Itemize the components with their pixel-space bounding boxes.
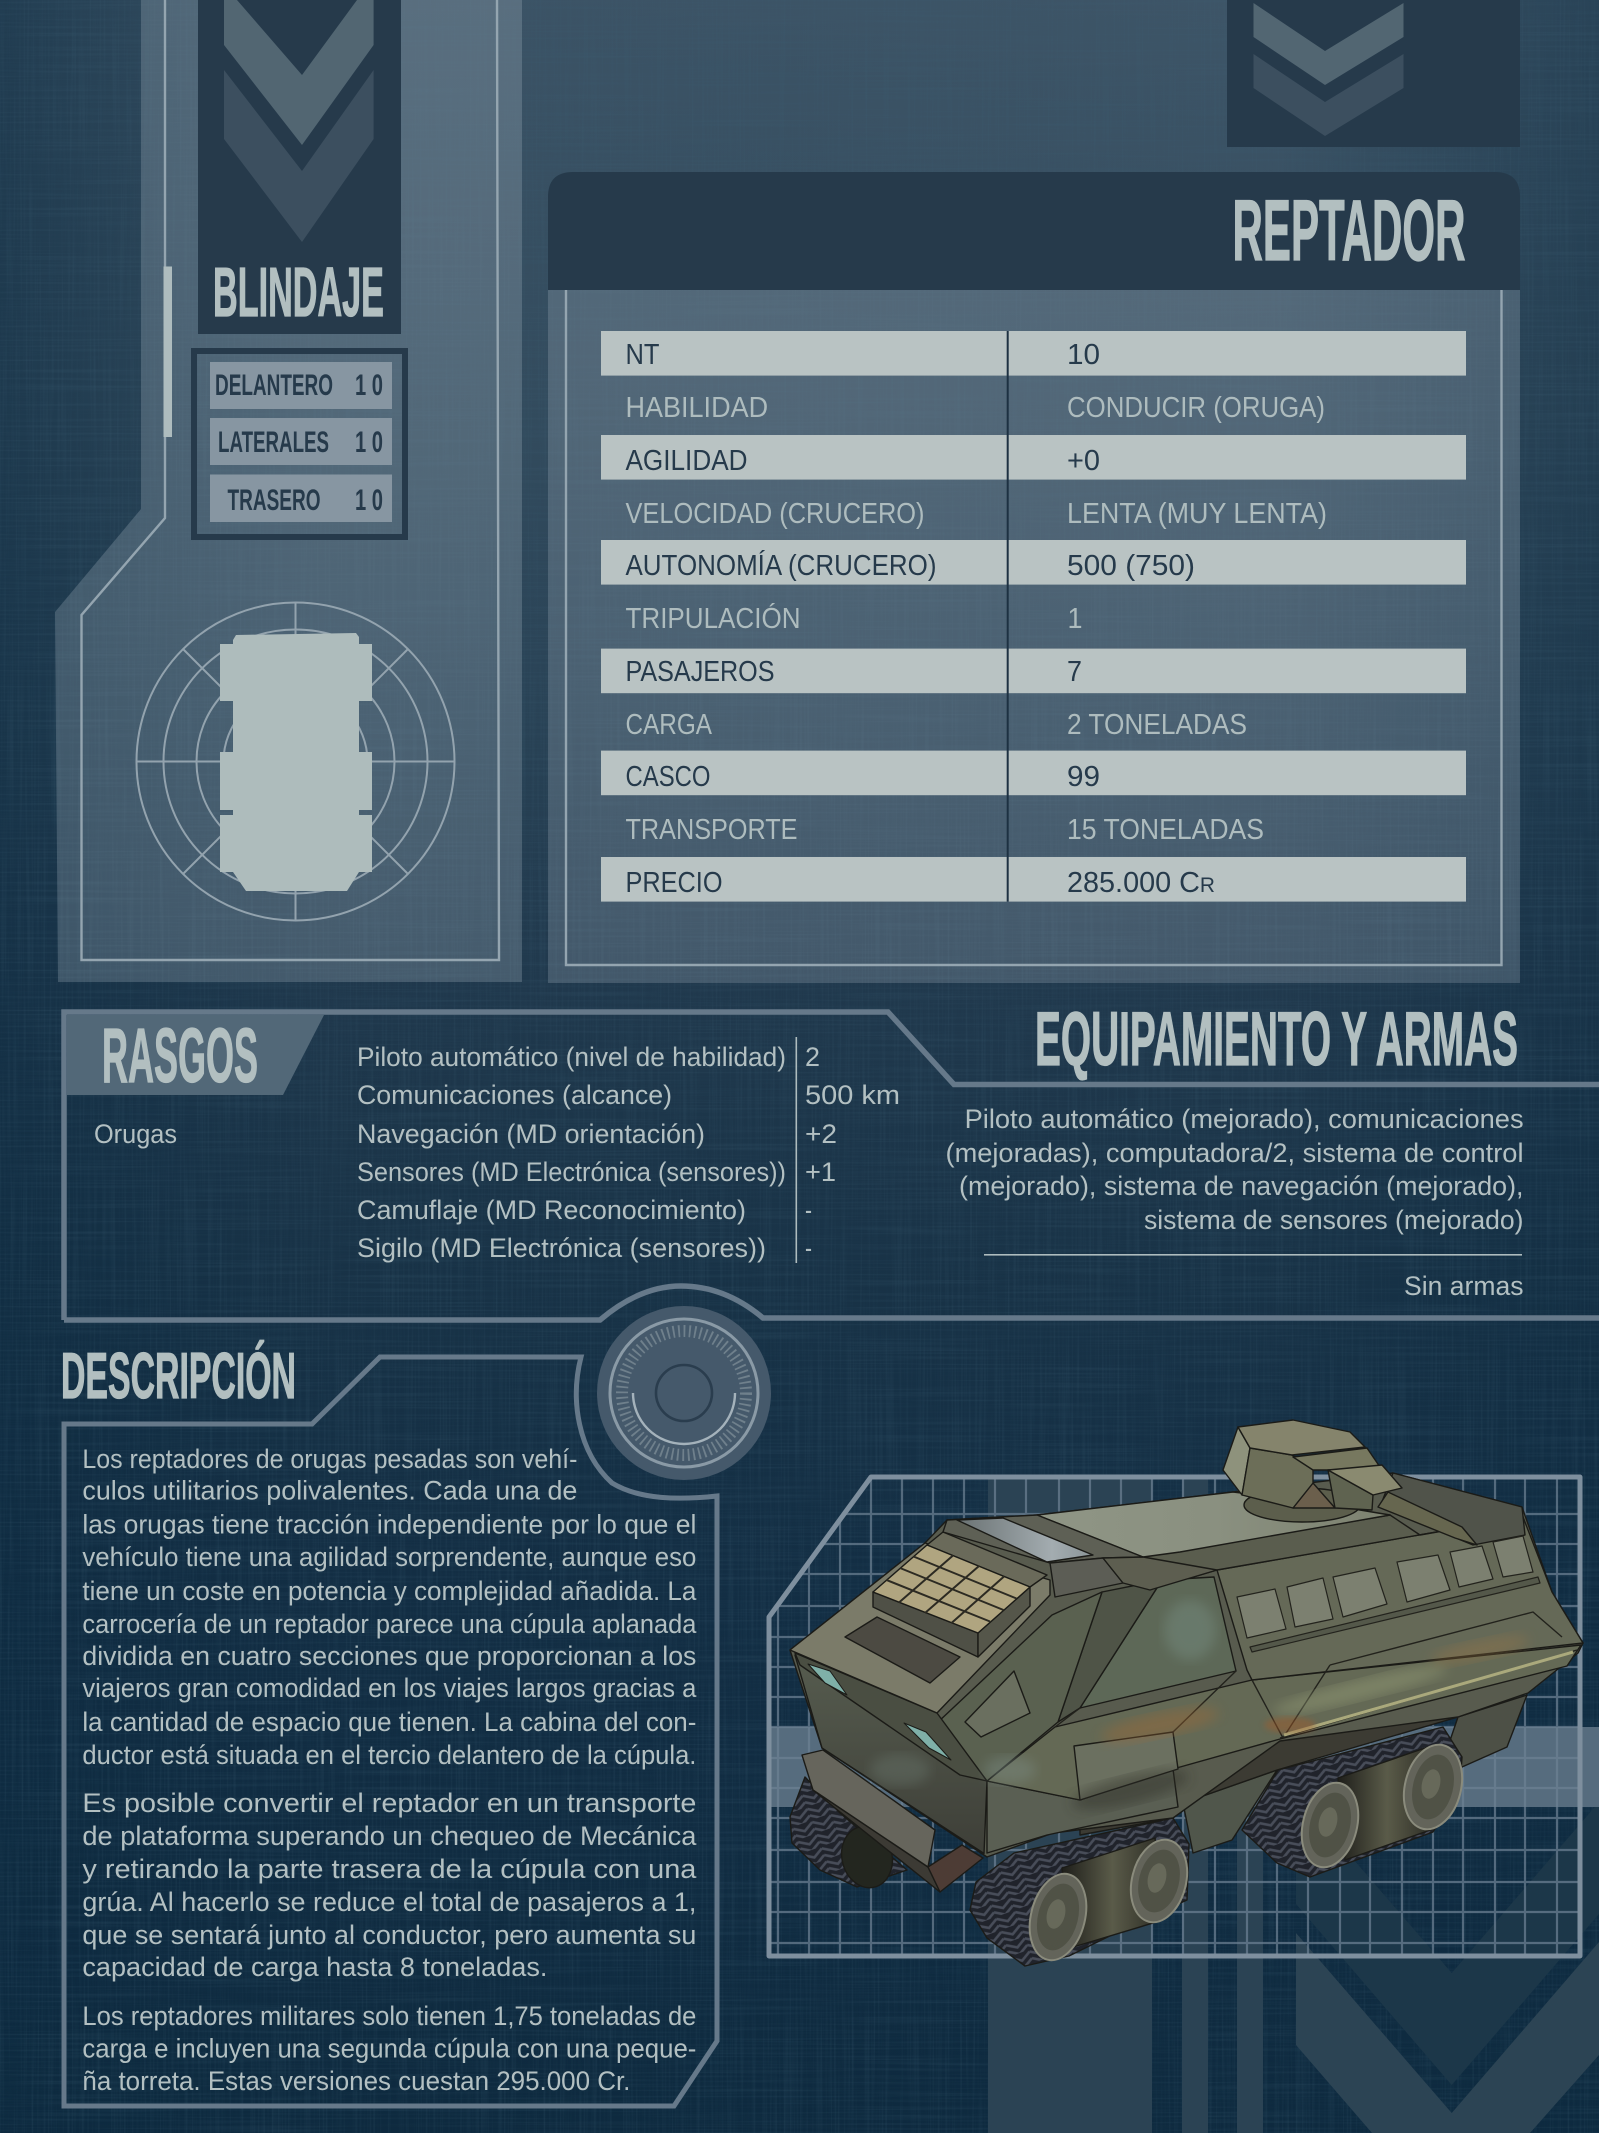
systems list: +1 — [805, 1157, 836, 1187]
armour values table: 1 0 — [355, 426, 383, 459]
armour values table: 1 0 — [355, 484, 383, 517]
systems list: 2 — [805, 1042, 820, 1072]
illustration: crawler vehicle — [790, 1420, 1583, 1966]
armour heading block: BLINDAJE — [213, 253, 384, 331]
stats table: 285.000 CR — [1067, 867, 1215, 899]
paragraph 1: dividida en cuatro secciones que proporcionan a los — [82, 1641, 696, 1671]
heading: descripcion: DESCRIPCIÓN — [61, 1339, 296, 1412]
paragraph 2: capacidad de carga hasta 8 toneladas. — [82, 1952, 547, 1982]
panel: description — [61, 1339, 717, 2106]
armour values table: 1 0 — [355, 369, 383, 402]
paragraph 3: carga e incluyen una segunda cúpula con una peque- — [82, 2034, 696, 2064]
armour values table: LATERALES — [218, 426, 329, 459]
equipment text: (mejoradas), computadora/2, sistema de control — [946, 1138, 1524, 1168]
header bar — [548, 172, 1520, 290]
systems list: Camuflaje (MD Reconocimiento) — [357, 1195, 746, 1225]
stats table: TRANSPORTE — [626, 814, 798, 846]
radar diagram with vehicle silhouette — [136, 602, 454, 920]
systems list: 500 km — [805, 1080, 900, 1110]
paragraph 1: viajeros gran comodidad en los viajes largos gracias a — [82, 1673, 697, 1703]
paragraph 1: ductor está situada en el tercio delantero de la cúpula. — [82, 1740, 696, 1770]
paragraph 1: vehículo tiene una agilidad sorprendente, aunque eso — [82, 1542, 696, 1572]
stats table: 1 — [1068, 603, 1082, 635]
stats table: TRIPULACIÓN — [626, 602, 800, 635]
stats table: PASAJEROS — [626, 656, 774, 688]
stats table: NT — [626, 339, 660, 371]
stats table: LENTA (MUY LENTA) — [1067, 498, 1327, 530]
stats table: +0 — [1067, 445, 1100, 477]
paragraph 1: tiene un coste en potencia y complejidad añadida. La — [82, 1576, 697, 1606]
stats table: 500 (750) — [1067, 550, 1195, 582]
trait text: Orugas — [94, 1119, 177, 1149]
stats table: HABILIDAD — [626, 392, 768, 424]
equipment text: sistema de sensores (mejorado) — [1144, 1205, 1524, 1235]
icon: chevrons — [224, 0, 374, 242]
rear skirt and underside — [1080, 1692, 1528, 1853]
paragraph 1: las orugas tiene tracción independiente por lo que el — [82, 1509, 696, 1539]
armour heading block — [198, 0, 401, 334]
heading tab: rasgos — [67, 1013, 324, 1099]
front track set — [970, 1818, 1195, 1966]
panel: armour column — [55, 0, 522, 982]
stats table: 2 TONELADAS — [1067, 709, 1247, 741]
systems list — [357, 1037, 900, 1263]
stats table: CASCO — [626, 761, 710, 793]
stats table: 10 — [1067, 339, 1100, 371]
teal windows — [808, 1664, 951, 1760]
stats table: 99 — [1067, 761, 1100, 793]
paragraph 2: y retirando la parte trasera de la cúpula con una — [82, 1854, 697, 1884]
stats table: CARGA — [626, 709, 713, 741]
stats table: 15 TONELADAS — [1067, 814, 1264, 846]
stats table: VELOCIDAD (CRUCERO) — [626, 498, 924, 530]
solar panel roof — [873, 1545, 1030, 1633]
systems list: Sensores (MD Electrónica (sensores)) — [357, 1157, 786, 1187]
armour values table — [194, 351, 405, 537]
paragraph 2: Es posible convertir el reptador en un transporte — [82, 1788, 696, 1818]
equipment text: (mejorado), sistema de navegación (mejorado), — [959, 1171, 1524, 1201]
systems list: Piloto automático (nivel de habilidad) — [357, 1042, 786, 1072]
systems list: Navegación (MD orientación) — [357, 1119, 705, 1149]
paragraph 3 — [82, 2001, 696, 2096]
paragraph 3: Los reptadores militares solo tienen 1,75 toneladas de — [82, 2001, 696, 2031]
bumper — [802, 1750, 983, 1892]
systems list: - — [805, 1195, 812, 1225]
background graphic: bottom right stripes and chevrons — [767, 1477, 1599, 2133]
equipment text: Sin armas — [1404, 1271, 1524, 1301]
paragraph 1: culos utilitarios polivalentes. Cada una de — [82, 1475, 577, 1505]
side windows — [1237, 1536, 1540, 1652]
panel lines — [1055, 1612, 1577, 1738]
paragraph 1 — [82, 1444, 697, 1770]
paragraph 2 — [82, 1788, 697, 1982]
armour values table: TRASERO — [228, 484, 320, 517]
stats table — [601, 331, 1466, 902]
paragraph 1: Los reptadores de orugas pesadas son vehí- — [82, 1444, 577, 1474]
stats table: CONDUCIR (ORUGA) — [1067, 392, 1325, 424]
heading tab: rasgos: RASGOS — [102, 1013, 258, 1099]
paragraph 2: de plataforma superando un chequeo de Mecánica — [82, 1821, 697, 1851]
systems list: +2 — [805, 1119, 837, 1149]
stats table: 7 — [1067, 656, 1082, 688]
icon: dial — [597, 1306, 771, 1480]
equipment text — [946, 1104, 1524, 1301]
panel: traits and equipment frame — [64, 997, 1599, 1320]
paragraph 3: ña torreta. Estas versiones cuestan 295.000 Cr. — [82, 2066, 630, 2096]
chart: blueprint grid — [767, 1477, 1580, 1956]
paragraph 2: grúa. Al hacerlo se reduce el total de pasajeros a 1, — [82, 1887, 696, 1917]
accent bar — [164, 266, 172, 437]
systems list: Comunicaciones (alcance) — [357, 1080, 672, 1110]
systems list: - — [805, 1233, 812, 1263]
stats table: AGILIDAD — [626, 445, 748, 477]
paragraph 1: la cantidad de espacio que tienen. La cabina del con- — [82, 1707, 696, 1737]
rear track set — [1242, 1727, 1471, 1877]
panel: vehicle stats — [548, 172, 1520, 983]
panel: top right chevron block — [1227, 0, 1520, 147]
paragraph 1: carrocería de un reptador parece una cúpula aplanada — [82, 1609, 697, 1639]
hull — [790, 1473, 1583, 1857]
highlight line — [1284, 1652, 1573, 1735]
turret — [1223, 1420, 1477, 1545]
paragraph 2: que se sentará junto al conductor, pero aumenta su — [82, 1920, 696, 1950]
rear-left track — [790, 1777, 907, 1893]
equipment text: Piloto automático (mejorado), comunicaciones — [965, 1104, 1524, 1134]
stats table: AUTONOMÍA (CRUCERO) — [626, 549, 936, 582]
systems list: Sigilo (MD Electrónica (sensores)) — [357, 1233, 766, 1263]
armour values table: DELANTERO — [215, 369, 333, 402]
paint weathering — [870, 1600, 1531, 1818]
stats table: PRECIO — [626, 867, 722, 899]
